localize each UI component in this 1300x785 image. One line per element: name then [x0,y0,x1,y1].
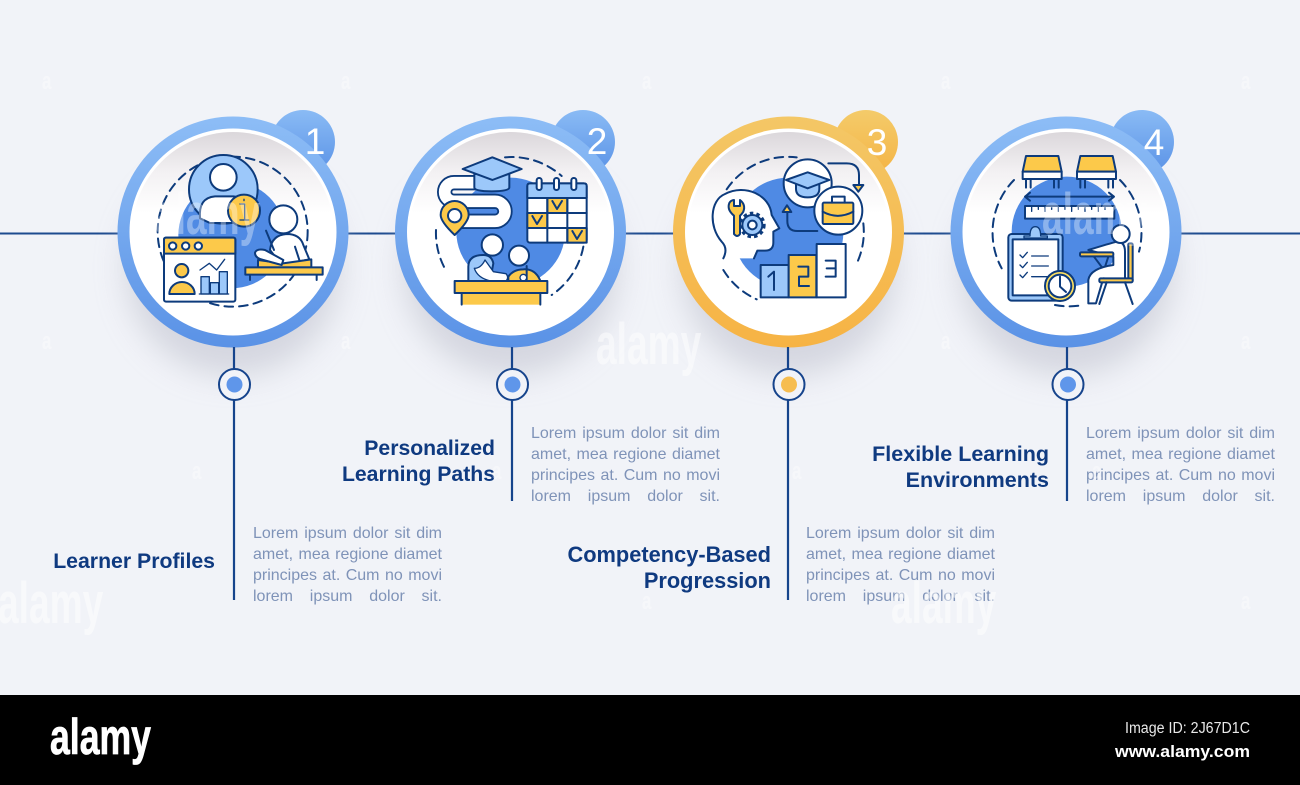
footer bar [0,695,1300,785]
heading: Competency-Based Progression [568,542,771,592]
text block: step 4 description: Lorem ipsum dolor sit dim [1086,425,1275,442]
step 2 connector and node [497,347,528,501]
icon: personalized paths [436,157,587,305]
icon: competency progression [713,157,864,299]
text block: step 2 description: principes at. Cum no movi [531,467,720,484]
heading: Personalized Learning Paths: Learning Paths [342,462,495,486]
text block: step 4 description: principes at. Cum no movi [1086,467,1275,484]
watermark overlay: alamy [0,571,103,636]
watermark overlay: a [941,328,950,355]
badge number 3: 3 [867,122,887,163]
text block: step 3 description [806,525,995,605]
footer image id: Image ID: 2J67D1C [1125,720,1250,737]
text block: step 2 description [531,425,720,505]
panel: step 3 circle [673,110,904,376]
watermark overlay: a [341,68,350,95]
step 4 connector and node [1052,347,1084,501]
watermark overlay: a [492,458,501,485]
text block: step 4 description: amet, mea regione diamet [1086,446,1275,463]
watermark overlay: a [941,68,950,95]
text block: step 3 description: lorem ipsum dolor sit. [806,588,995,605]
badge number 2: 2 [587,121,607,162]
text block: step 2 description: lorem ipsum dolor sit. [531,488,720,505]
text block: step 1 description [253,525,442,605]
heading: Personalized Learning Paths: Personalized [364,437,495,460]
text block: step 3 description: amet, mea regione diamet [806,546,995,563]
text block: step 1 description: amet, mea regione diamet [253,546,442,563]
heading: Learner Profiles: Learner Profiles [53,549,215,573]
step 1 connector and node [219,347,250,600]
icon: flexible environments [993,156,1141,306]
badge number 4: 4 [1144,122,1164,163]
panel: step 4 circle [950,110,1182,376]
text block: step 3 description: Lorem ipsum dolor sit dim [806,525,995,542]
watermark overlay: a [1241,68,1250,95]
text block: step 2 description: amet, mea regione diamet [531,446,720,463]
text block: step 1 description: lorem ipsum dolor sit. [253,588,442,605]
icon: learner profile [158,155,323,307]
watermark overlay: a [1241,588,1250,615]
badge number 1: 1 [305,121,325,162]
watermark overlay: a [1092,458,1101,485]
heading: Flexible Learning Environments: Environments [906,468,1049,492]
watermark overlay: alamy [596,312,701,377]
text block: step 3 description: principes at. Cum no movi [806,567,995,584]
text block: step 4 description: lorem ipsum dolor sit. [1086,488,1275,505]
text block: step 1 description: principes at. Cum no movi [253,567,442,584]
text block: step 4 description [1086,425,1275,505]
text block: step 2 description: Lorem ipsum dolor sit dim [531,425,720,442]
footer url: www.alamy.com [1114,742,1250,761]
step 3 connector and node [774,347,804,600]
panel: step 2 circle [395,110,626,376]
panel: step 1 circle [118,110,348,376]
watermark overlay: a [42,328,51,355]
text block: step 1 description: Lorem ipsum dolor sit dim [253,525,442,542]
watermark overlay: alamy [1042,182,1147,247]
watermark overlay: alamy [155,182,260,247]
watermark overlay: a [1241,328,1250,355]
watermark overlay: a [642,68,651,95]
watermark overlay: a [792,458,801,485]
timeline horizontal line [0,232,1300,234]
watermark overlay: a [642,588,651,615]
watermark overlay: a [42,68,51,95]
heading: Flexible Learning Environments [872,442,1049,492]
watermark overlay: alamy [891,571,996,636]
watermark overlay: a [341,328,350,355]
watermark overlay: a [192,458,201,485]
heading: Personalized Learning Paths [342,437,495,486]
heading: Competency-Based Progression: Competency-Based [568,542,771,567]
heading: Competency-Based Progression: Progression [644,568,771,592]
heading: Flexible Learning Environments: Flexible Learning [872,442,1049,466]
